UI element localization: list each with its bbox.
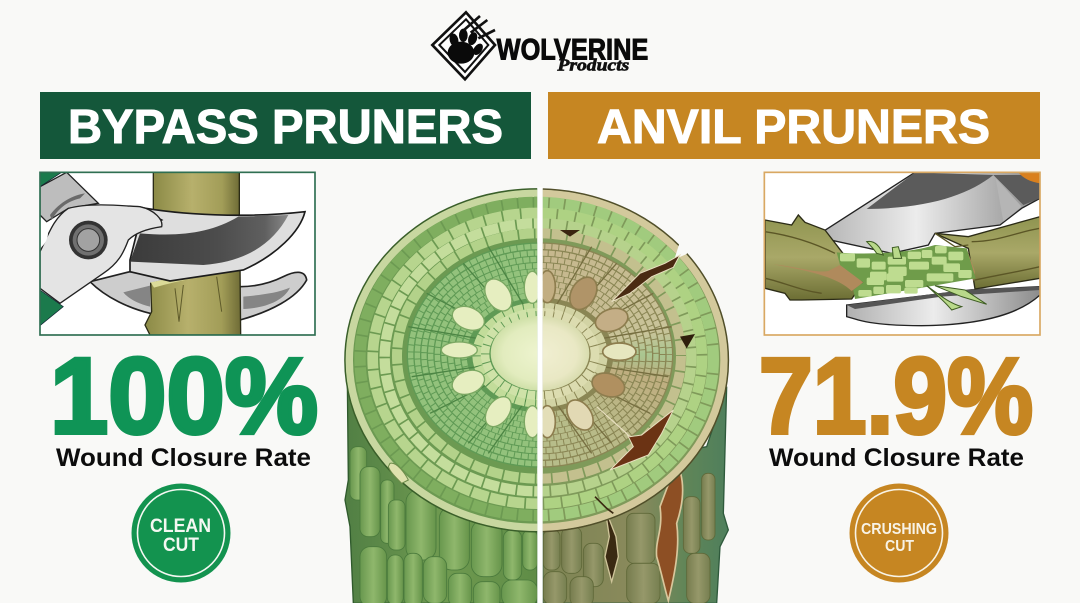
heading: bypass pruners: BYPASS PRUNERS: [68, 101, 503, 154]
cracks and bruises: [560, 230, 695, 513]
loose strands: [867, 241, 987, 310]
panel: anvil header: [548, 92, 1040, 159]
badge: clean cut: [132, 484, 230, 582]
upper blade: [130, 207, 305, 281]
stat: bypass 100%: 100%: [50, 335, 318, 456]
illustration: bypass pruner clean cut: [40, 172, 315, 335]
healthy half: [344, 188, 538, 603]
crushed fibres: [837, 241, 987, 310]
damaged vessels: [539, 271, 636, 438]
illustration: anvil pruner crushing cut: [764, 172, 1040, 335]
stem rot crack: [656, 473, 683, 601]
stem split: [605, 508, 618, 582]
right branch: [935, 217, 1040, 289]
icon: diamond with paw: [432, 12, 495, 79]
healthy rim blister: [388, 463, 408, 483]
damaged pith: [542, 316, 590, 391]
damaged half: [542, 188, 730, 603]
healthy pith: [490, 316, 538, 391]
illustration: stem cross-section: [345, 187, 728, 603]
lower branch: [145, 264, 241, 335]
upper branch: [152, 173, 240, 214]
healthy wood ring: [406, 242, 538, 468]
label: bypass wound closure rate: Wound Closure Rate: [56, 444, 311, 472]
logo tagline: Products: [556, 56, 630, 75]
handle plate: [40, 172, 98, 222]
badge text: crushing: CRUSHING: [861, 521, 937, 538]
lower hook jaw: [90, 272, 307, 320]
lower anvil: [847, 287, 1040, 326]
badge text: clean: CLEAN: [150, 516, 211, 537]
panel: bypass header: [40, 92, 531, 159]
pivot bolt: [69, 221, 108, 259]
healthy vessels: [441, 271, 540, 438]
damaged wood ring: [542, 242, 674, 468]
badge: crushing cut: [850, 484, 948, 582]
label: anvil wound closure rate: Wound Closure Rate: [769, 444, 1024, 472]
badge text: cut: CUT: [885, 538, 914, 555]
left branch: [765, 215, 863, 300]
logo wordmark: WOLVERINE: [497, 33, 648, 66]
healthy disc rings: [344, 188, 538, 532]
green handle grips: [40, 172, 63, 326]
damaged disc rings: [542, 188, 730, 532]
center divider: [537, 187, 543, 603]
badge text: cut: CUT: [163, 535, 199, 556]
top blade: [815, 172, 1040, 253]
logo: Wolverine Products: [432, 12, 648, 79]
heading: anvil pruners: ANVIL PRUNERS: [597, 101, 990, 154]
damaged stem body: [543, 387, 728, 603]
healthy stem body: [345, 380, 537, 603]
stat: anvil 71.9%: 71.9%: [759, 335, 1033, 456]
